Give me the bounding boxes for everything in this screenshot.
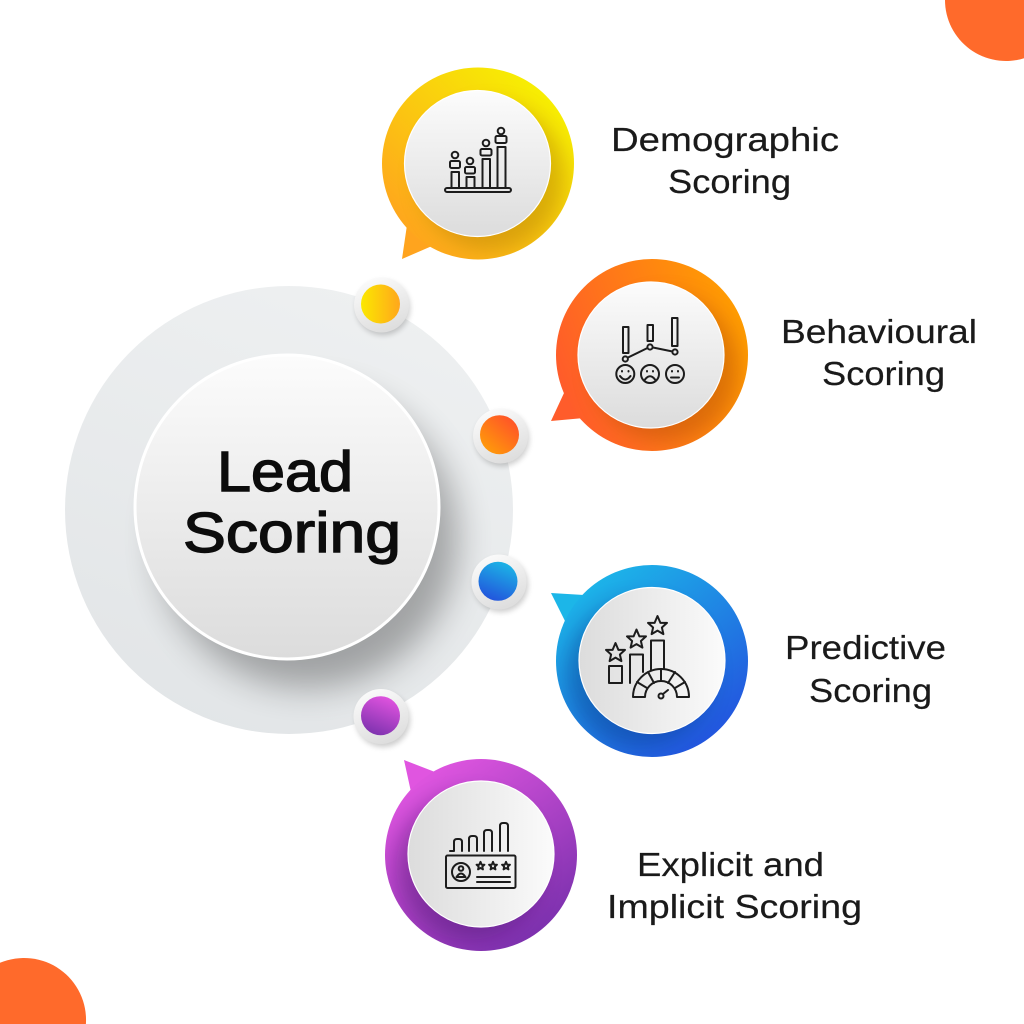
- label: predictive scoring: Scoring: [809, 672, 932, 709]
- icon: bars and smiley faces: [616, 318, 684, 383]
- inner disc: [408, 781, 554, 927]
- corner circle: top right: [945, 0, 1024, 61]
- speech bubble: [382, 68, 574, 260]
- corner circle: bottom left: [0, 958, 86, 1024]
- icon: people bar chart: [445, 128, 511, 192]
- title: Scoring: [183, 501, 401, 565]
- outer pale disc: [65, 286, 513, 734]
- inner disc: [578, 282, 724, 428]
- panel: behavioural scoring bubble: [551, 259, 748, 451]
- label: explicit and implicit scoring: [607, 846, 862, 925]
- panel: predictive scoring bubble: [551, 565, 748, 757]
- label: demographic scoring: Demographic: [611, 121, 839, 158]
- panel: explicit and implicit scoring bubble: [385, 759, 577, 951]
- connector dot: blue: [472, 554, 528, 612]
- label: explicit and implicit scoring: Implicit Scoring: [607, 888, 862, 925]
- label: predictive scoring: [785, 629, 946, 709]
- label: behavioural scoring: Scoring: [822, 355, 945, 392]
- speech bubble: [385, 759, 577, 951]
- label: demographic scoring: [611, 121, 839, 200]
- connector dot: yellow: [354, 278, 410, 335]
- inner hub disc: [135, 355, 439, 659]
- speech bubble: [551, 565, 748, 757]
- connector dot: purple: [354, 689, 410, 747]
- panel: demographic scoring bubble: [382, 68, 574, 260]
- inner disc: [579, 588, 725, 734]
- connector dot: orange: [473, 408, 529, 466]
- hub shadow: [158, 388, 458, 688]
- label: explicit and implicit scoring: Explicit and: [637, 846, 824, 883]
- label: predictive scoring: Predictive: [785, 629, 946, 666]
- panel: central hub: [65, 286, 513, 734]
- inner disc: [404, 90, 550, 236]
- label: demographic scoring: Scoring: [668, 163, 791, 200]
- label: behavioural scoring: [781, 313, 977, 392]
- icon: rating card and bars: [446, 823, 516, 888]
- icon: star bars and gauge: [606, 616, 689, 698]
- bubble shadow: [567, 600, 713, 746]
- speech bubble: [551, 259, 748, 451]
- bubble shadow: [592, 295, 738, 441]
- bubble shadow: [396, 794, 542, 940]
- title: [183, 440, 401, 565]
- title: Lead: [217, 440, 353, 504]
- bubble shadow: [418, 104, 564, 250]
- label: behavioural scoring: Behavioural: [781, 313, 977, 350]
